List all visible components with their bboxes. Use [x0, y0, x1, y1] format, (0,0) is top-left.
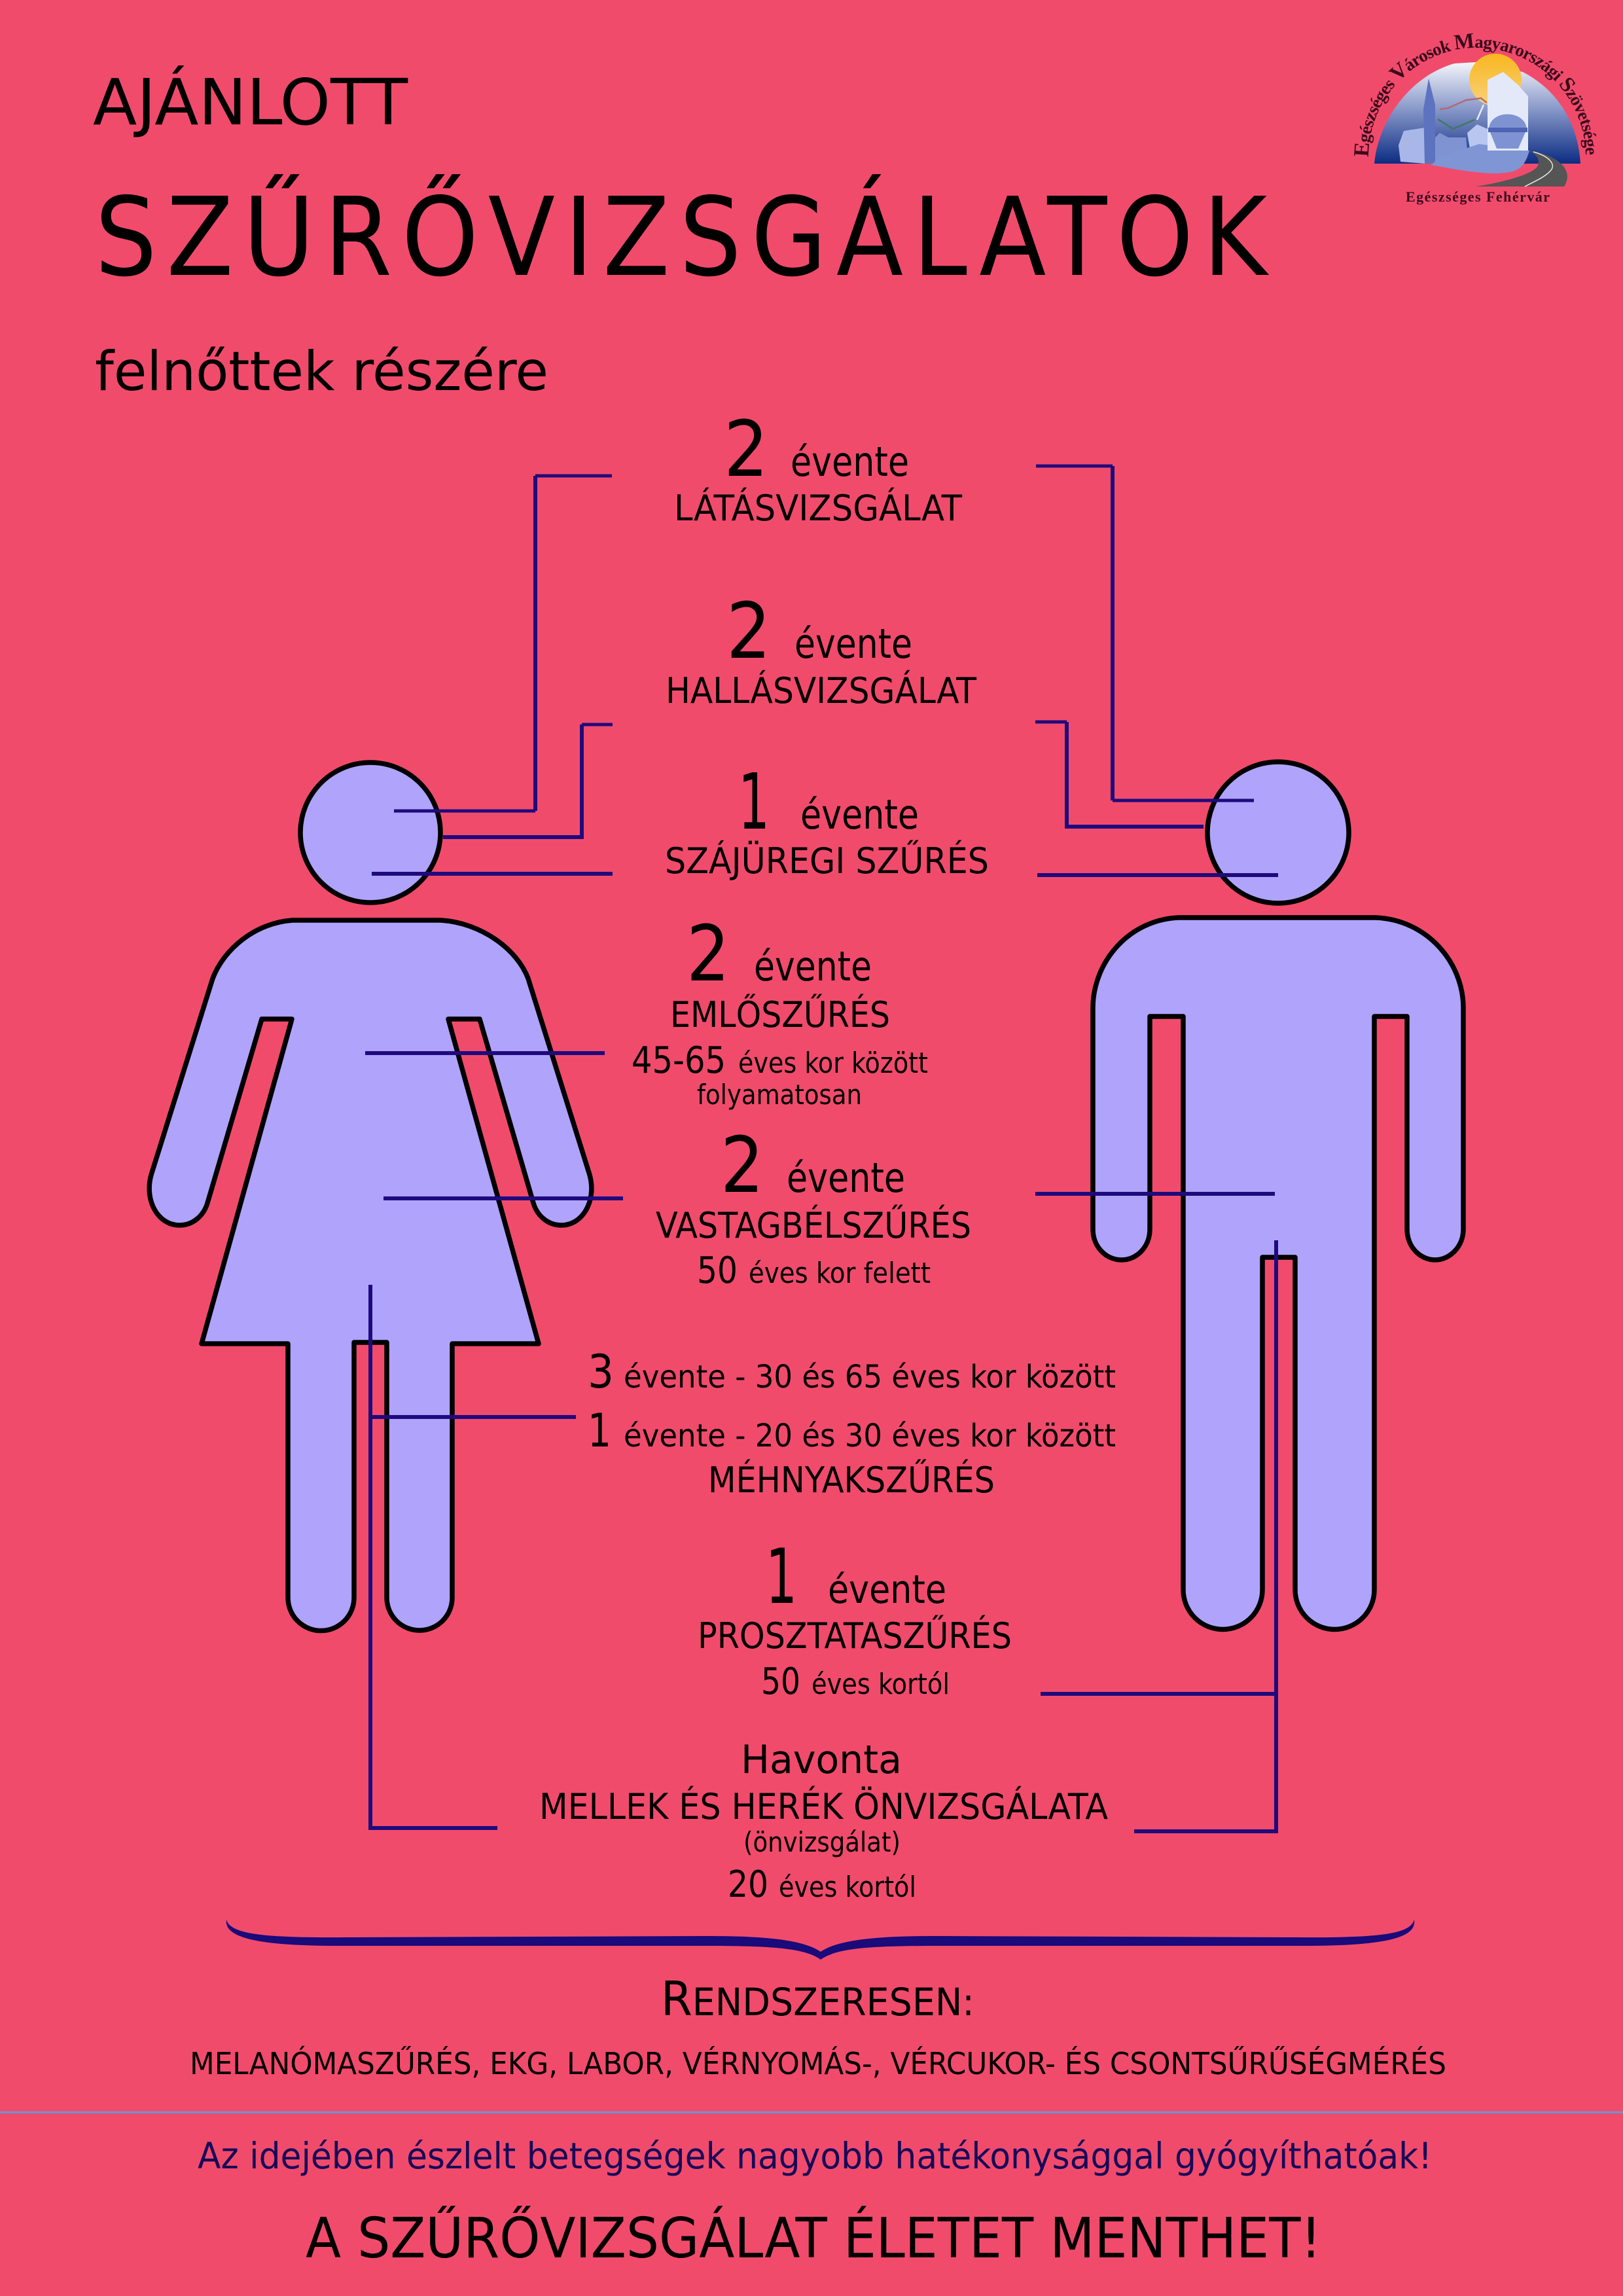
screening: prostate: PROSZTATASZŰRÉS — [698, 1615, 1012, 1657]
connector lines: man — [1035, 466, 1278, 1831]
connector lines: woman — [365, 476, 623, 1828]
screening: breast — [632, 908, 928, 1111]
heading: regularly: RENDSZERESEN: — [661, 1971, 974, 2026]
screening: prostate: 1 — [766, 1533, 797, 1621]
screening: breast: 45-65 — [632, 1039, 726, 1082]
logo map outline — [1438, 98, 1487, 129]
screening: self-examination — [539, 1737, 1108, 1906]
logo: Egészséges Városok Magyarországi Szövetsége — [1354, 33, 1597, 205]
screening: self-examination: 20 — [728, 1863, 768, 1906]
message: Az idejében észlelt betegségek nagyobb hatékonysággal gyógyíthatóak! — [198, 2135, 1432, 2177]
screening: breast: évente — [754, 942, 872, 990]
header title — [93, 65, 1270, 403]
screening: hearing: évente — [794, 620, 912, 668]
screening: vision — [674, 404, 962, 529]
screening: prostate: 50 — [761, 1660, 800, 1703]
screening: oral cavity: évente — [800, 791, 919, 838]
screening: self-examination: éves kortól — [779, 1871, 916, 1904]
screening: colon: évente — [787, 1154, 905, 1202]
screening: oral cavity: 1 — [738, 757, 770, 847]
brace — [226, 1920, 1414, 1960]
screening: prostate: éves kortól — [812, 1668, 950, 1701]
logo caption: Egészséges Fehérvár — [1406, 188, 1550, 205]
screening: vision: évente — [791, 438, 909, 486]
screening: cervical: 3 — [588, 1345, 614, 1399]
screening: cervical: évente - 20 és 30 éves kor között — [624, 1418, 1116, 1454]
logo dome — [1374, 62, 1580, 164]
logo sun — [1469, 54, 1522, 106]
man body — [1093, 918, 1463, 1629]
logo arc text: Egészséges Városok Magyarországi Szövetsége — [1354, 33, 1597, 157]
screening: vision: 2 — [724, 404, 768, 494]
subtitle: felnőttek részére: felnőttek részére — [95, 340, 548, 403]
screening: prostate: évente — [828, 1567, 946, 1613]
woman head — [300, 762, 440, 903]
screening: hearing: HALLÁSVIZSGÁLAT — [666, 670, 976, 711]
woman body — [149, 920, 592, 1631]
screening: prostate — [698, 1533, 1012, 1703]
screening: cervical: MÉHNYAKSZŰRÉS — [708, 1460, 995, 1501]
screening: oral cavity — [665, 757, 989, 882]
screening: hearing — [666, 586, 976, 711]
screening: self-examination: MELLEK ÉS HERÉK ÖNVIZSGÁLATA — [539, 1786, 1108, 1827]
screening: breast: éves kor között — [738, 1047, 928, 1080]
screening: colon: 50 — [697, 1249, 738, 1292]
screening: colon: éves kor felett — [749, 1257, 931, 1290]
logo road — [1476, 151, 1567, 187]
screening: cervical: évente - 30 és 65 éves kor között — [624, 1359, 1116, 1395]
figure: woman — [149, 762, 592, 1631]
list of regular checks: MELANÓMASZŰRÉS, EKG, LABOR, VÉRNYOMÁS-, VÉRCUKOR- ÉS CSONTSŰRŰSÉGMÉRÉS — [190, 2046, 1446, 2081]
screening: breast: 2 — [687, 908, 730, 999]
screening: self-examination: (önvizsgálat) — [743, 1826, 901, 1858]
screening: colon: 2 — [721, 1120, 764, 1210]
screening: self-examination: Havonta — [741, 1737, 902, 1783]
screening: colon — [656, 1120, 971, 1292]
screening: colon: VASTAGBÉLSZŰRÉS — [656, 1205, 971, 1246]
screening: vision: LÁTÁSVIZSGÁLAT — [674, 488, 962, 529]
figure: man — [1093, 762, 1463, 1629]
screening: cervical — [588, 1345, 1116, 1501]
screening: hearing: 2 — [726, 586, 771, 676]
closing slogan: A SZŰRŐVIZSGÁLAT ÉLETET MENTHET! — [306, 2205, 1321, 2271]
logo town buildings — [1399, 72, 1529, 173]
title: szűrővizsgálatok: SZŰRŐVIZSGÁLATOK — [95, 173, 1270, 301]
screening: breast: EMLŐSZŰRÉS — [670, 994, 890, 1035]
title line: ajánlott: AJÁNLOTT — [93, 65, 408, 139]
screening: breast: folyamatosan — [697, 1079, 862, 1111]
man head — [1207, 762, 1349, 903]
screening: cervical: 1 — [588, 1404, 611, 1458]
screening: oral cavity: SZÁJÜREGI SZŰRÉS — [665, 840, 989, 882]
